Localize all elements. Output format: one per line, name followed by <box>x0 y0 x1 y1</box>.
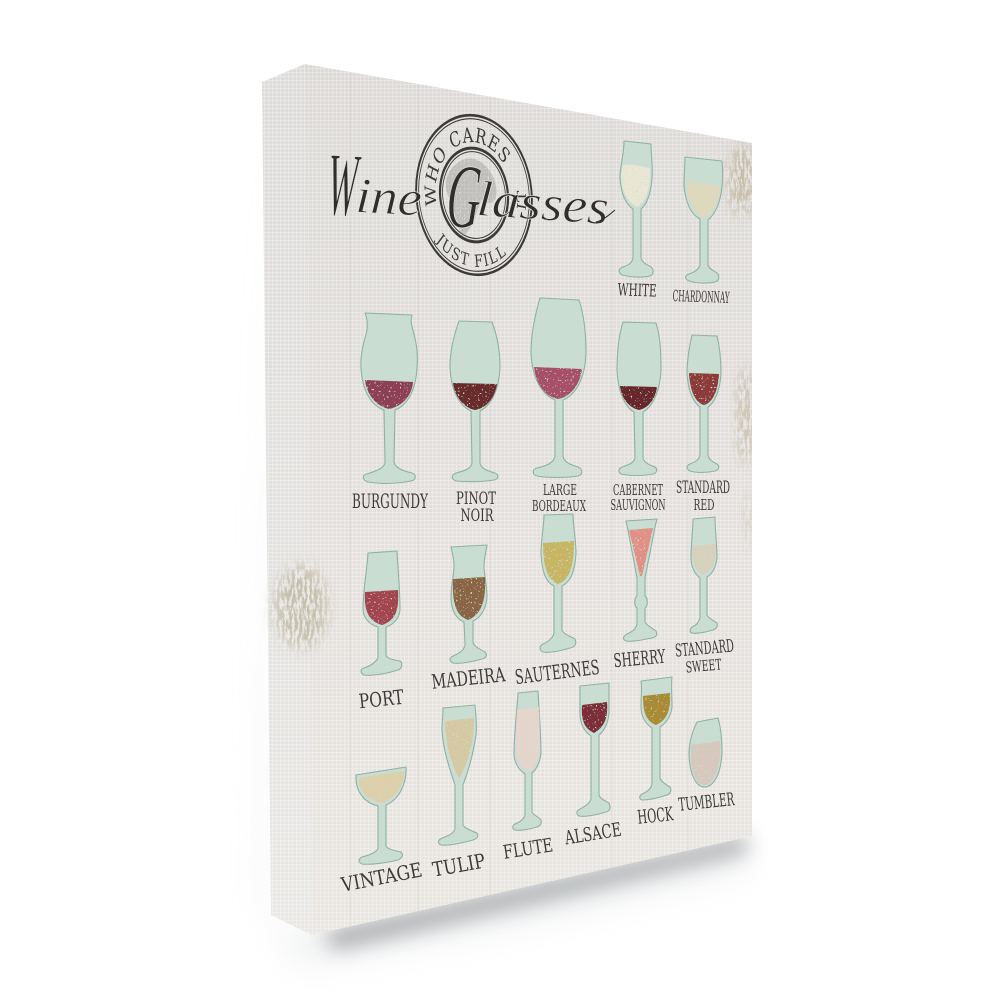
label: pinot noir: PINOT <box>456 489 496 508</box>
label: pinot noir: NOIR <box>460 506 494 526</box>
label: cabernet sauvignon <box>610 481 666 514</box>
label: tulip: TULIP <box>431 849 487 882</box>
label: standard red <box>676 478 730 514</box>
title: lasses <box>475 170 611 235</box>
label: standard sweet: STANDARD <box>674 636 735 662</box>
title: G <box>444 144 485 248</box>
glass: burgundy <box>361 313 417 483</box>
glass: vintage <box>356 767 406 864</box>
label: burgundy: BURGUNDY <box>352 489 428 513</box>
title <box>325 135 615 248</box>
stamp text bottom: JUST FILL IT <box>434 190 526 267</box>
glass: tumbler <box>689 718 722 787</box>
title: ine <box>354 167 423 226</box>
stamp centre engraving <box>443 156 501 238</box>
label: white: WHITE <box>617 280 657 302</box>
glass: tulip <box>438 705 478 845</box>
text: CHARDONNAY <box>672 287 730 307</box>
label: hock: HOCK <box>636 803 675 829</box>
glass: sauternes <box>540 514 576 652</box>
stamp: who cares just fill it <box>415 114 533 276</box>
glass: alsace <box>577 683 610 816</box>
glass: hock <box>640 677 672 800</box>
glass: white <box>619 141 653 277</box>
canvas: front face <box>300 60 760 940</box>
label: standard red: RED <box>694 498 714 514</box>
label: port: PORT <box>358 685 405 713</box>
glass: pinot noir <box>450 321 500 482</box>
label: standard sweet: SWEET <box>685 655 722 677</box>
label: vintage: VINTAGE <box>338 858 424 897</box>
label: large bordeaux: LARGE <box>543 481 577 499</box>
glass: cabernet sauvignon <box>617 322 661 476</box>
canvas shadow <box>262 100 748 965</box>
canvas: side face <box>262 64 312 935</box>
label: flute: FLUTE <box>502 834 554 864</box>
label: madeira: MADEIRA <box>430 662 507 694</box>
glass: standard red <box>687 335 721 472</box>
glass: standard sweet <box>690 517 717 633</box>
title: W <box>325 135 363 236</box>
label: sherry: SHERRY <box>613 646 667 672</box>
glass: sherry <box>623 519 657 641</box>
label: cabernet sauvignon: CABERNET <box>613 481 663 499</box>
glass: flute <box>513 691 541 830</box>
label: alsace: ALSACE <box>563 819 623 850</box>
canvas distress patch <box>274 565 328 649</box>
label: standard sweet <box>674 636 735 677</box>
label: large bordeaux <box>532 481 586 515</box>
label: tumbler: TUMBLER <box>677 789 736 816</box>
glass: madeira <box>450 545 487 663</box>
label: pinot noir <box>456 489 496 526</box>
label: cabernet sauvignon: SAUVIGNON <box>610 496 666 514</box>
label: large bordeaux: BORDEAUX <box>532 497 586 515</box>
label: standard red: STANDARD <box>676 478 730 498</box>
glass: port <box>361 551 402 675</box>
label: sauternes: SAUTERNES <box>514 655 601 689</box>
stamp text top: WHO CARES <box>424 128 510 206</box>
glass: large bordeaux <box>531 298 586 478</box>
glass: chardonnay <box>684 157 723 283</box>
